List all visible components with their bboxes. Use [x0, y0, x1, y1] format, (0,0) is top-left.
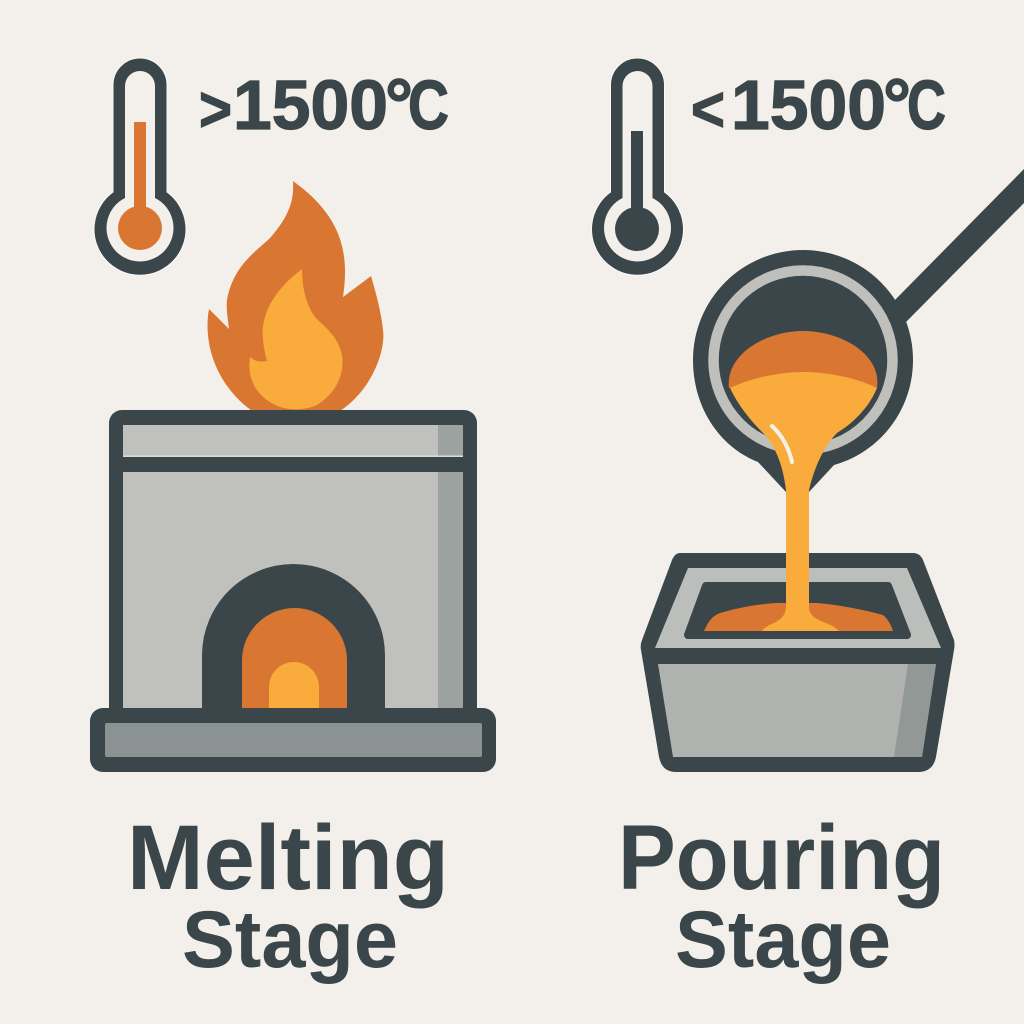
temperature label: above 1500 C: 1500 — [233, 66, 388, 144]
temperature label: above 1500 C: ° — [385, 65, 413, 145]
furnace base — [90, 708, 496, 772]
temperature label: below 1500 C — [691, 65, 946, 145]
temperature label: above 1500 C: C — [408, 66, 449, 144]
furnace body — [109, 410, 477, 722]
mold front shadow — [894, 664, 936, 757]
mold outer shell — [641, 553, 954, 772]
temperature label: above 1500 C — [199, 65, 449, 145]
icon: ladle — [693, 169, 1024, 492]
icon: flame — [208, 181, 383, 411]
temperature label: below 1500 C: C — [907, 66, 946, 144]
mold cavity — [688, 586, 907, 635]
temperature label: below 1500 C: < — [691, 73, 725, 145]
heading: pouring stage: Pouring — [618, 807, 945, 909]
icon: casting mold — [641, 553, 954, 772]
heading: melting stage — [127, 807, 449, 985]
molten pool — [704, 603, 893, 631]
mold front face — [658, 664, 936, 757]
icon: cool thermometer — [592, 58, 684, 275]
ladle body and spout — [693, 250, 913, 492]
furnace — [90, 410, 496, 772]
temperature label: below 1500 C: ° — [883, 65, 911, 145]
heading: pouring stage — [618, 807, 945, 985]
temperature label: above 1500 C: > — [199, 73, 232, 145]
ladle rim — [714, 270, 892, 450]
temperature label: below 1500 C: 1500 — [731, 66, 886, 144]
molten metal stream — [730, 372, 877, 631]
molten metal surface — [729, 331, 877, 388]
icon: hot thermometer — [94, 58, 186, 275]
panel: melting stage — [90, 58, 496, 985]
heading: melting stage: Stage — [182, 895, 398, 985]
furnace arch opening — [202, 564, 385, 712]
ladle handle — [892, 169, 1024, 322]
furnace front panel — [123, 472, 463, 708]
mold top rim — [655, 568, 941, 648]
stream highlight — [772, 426, 792, 462]
furnace top band — [123, 425, 463, 457]
heading: melting stage: Melting — [127, 807, 449, 909]
panel: pouring stage — [592, 58, 1024, 985]
heading: pouring stage: Stage — [675, 895, 891, 985]
